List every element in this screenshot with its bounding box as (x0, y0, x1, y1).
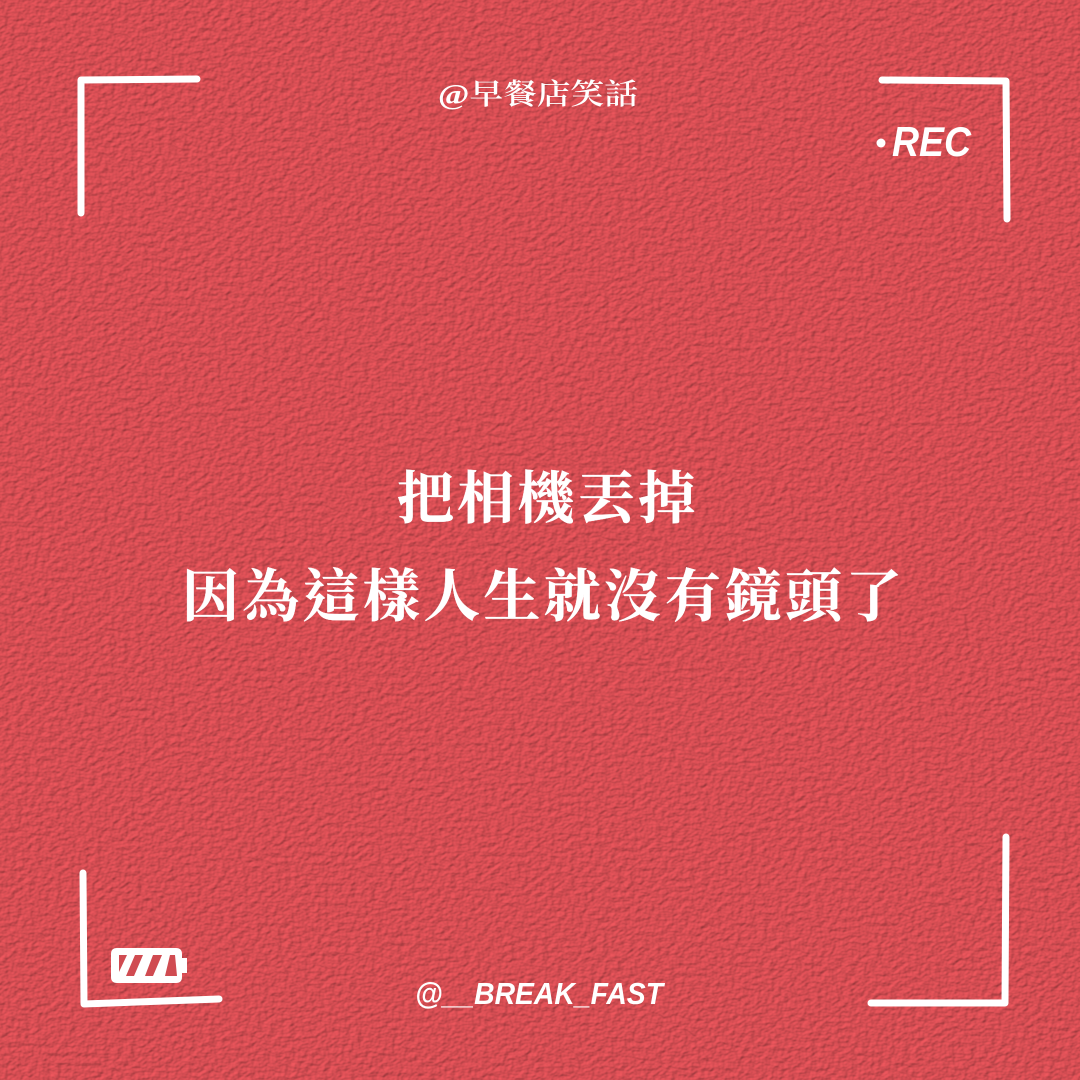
REC label: REC (892, 118, 972, 165)
bottom handle: @__BREAK_FAST (415, 976, 666, 1011)
viewfinder corner: top left (81, 79, 197, 213)
main joke text (182, 468, 906, 629)
icon: battery (111, 948, 187, 983)
viewfinder corner: bottom right (871, 837, 1006, 1003)
REC indicator (876, 118, 972, 165)
top handle: Chinese account name: @早餐店笑話 (438, 78, 638, 111)
icon: record dot (876, 138, 886, 148)
headline line 1: 把相機丟掉 (397, 468, 698, 531)
viewfinder corner: bottom left (83, 873, 219, 1004)
viewfinder corner: top right (882, 80, 1007, 219)
headline line 2: 因為這樣人生就沒有鏡頭了 (182, 566, 906, 629)
